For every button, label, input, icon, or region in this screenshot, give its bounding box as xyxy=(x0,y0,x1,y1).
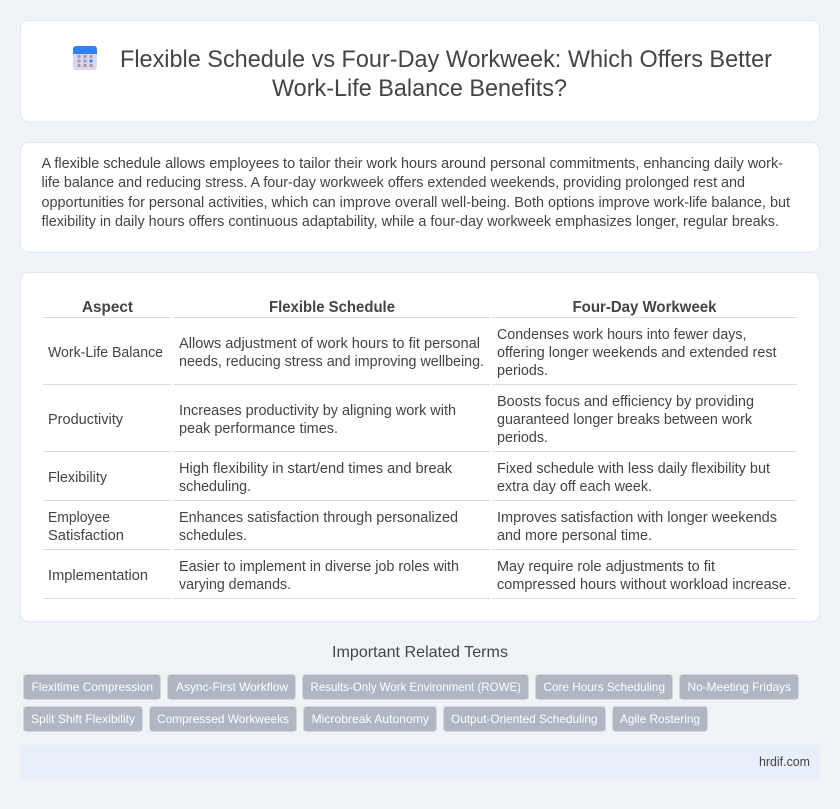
table row: flexibility xyxy=(43,461,797,501)
table row: flexibility: scheduling. xyxy=(179,479,251,495)
table row: employee satisfaction: schedules. xyxy=(179,528,247,544)
tag: Output-Oriented Scheduling: Output-Oriented Scheduling xyxy=(451,712,598,726)
table row: work-life balance: periods. xyxy=(497,363,548,379)
intro paragraph: A flexible schedule allows employees to tailor their work hours around personal commitments, enhancing daily work- xyxy=(42,156,783,172)
table header row xyxy=(43,299,797,318)
tag list xyxy=(24,674,798,732)
table row: work-life balance xyxy=(43,327,797,385)
table row: implementation: varying demands. xyxy=(179,577,291,593)
table row: productivity: peak performance times. xyxy=(179,421,338,437)
table row: implementation: compressed hours without workload increase. xyxy=(497,577,791,593)
tag: Microbreak Autonomy: Microbreak Autonomy xyxy=(312,712,429,726)
table row: productivity: Increases productivity by aligning work with xyxy=(179,403,456,419)
title: Flexible Schedule vs Four-Day Workweek: Which Offers Better xyxy=(120,46,772,73)
table row: work-life balance: needs, reducing stress and improving wellbeing. xyxy=(179,354,484,370)
table header row: Aspect xyxy=(82,299,134,316)
table row: employee satisfaction: and more personal time. xyxy=(497,528,652,544)
tag: No-Meeting Fridays: No-Meeting Fridays xyxy=(688,680,791,694)
tag: Split Shift Flexibility: Split Shift Flexibility xyxy=(31,712,135,726)
intro paragraph: opportunities for personal activities, which can improve overall well-being. Both options improve work-life balance, but xyxy=(42,195,790,211)
heading: important related terms: Important Related Terms xyxy=(332,644,508,661)
panel: title card xyxy=(20,20,820,122)
title xyxy=(120,46,772,102)
tag: Async-First Workflow: Async-First Workflow xyxy=(176,680,288,694)
tag: No-Meeting Fridays xyxy=(680,674,798,700)
table row: flexibility: extra day off each week. xyxy=(497,479,652,495)
table row: implementation: May require role adjustments to fit xyxy=(497,559,715,575)
table row: employee satisfaction: Satisfaction xyxy=(48,528,124,544)
panel: intro text card xyxy=(20,142,820,252)
table row: productivity: guaranteed longer breaks between work xyxy=(497,412,753,428)
tag: Agile Rostering xyxy=(612,706,708,732)
footer bar: hrdif.com xyxy=(759,754,810,769)
table row: productivity: periods. xyxy=(497,430,548,446)
footer bar xyxy=(20,745,820,779)
table row: productivity: Boosts focus and efficiency by providing xyxy=(497,394,754,410)
table header row: Flexible Schedule xyxy=(269,299,395,316)
tag: Core Hours Scheduling xyxy=(536,674,672,700)
table header row: Four-Day Workweek xyxy=(572,299,717,316)
table row: work-life balance: Allows adjustment of work hours to fit personal xyxy=(179,336,480,352)
table row: implementation: Implementation xyxy=(48,568,148,584)
tag: Agile Rostering: Agile Rostering xyxy=(620,712,700,726)
panel: comparison table card xyxy=(20,272,820,622)
icon: calendar xyxy=(73,46,97,70)
table row: flexibility: Flexibility xyxy=(48,470,108,486)
tag: Flexitime Compression: Flexitime Compression xyxy=(32,680,153,694)
tag: Flexitime Compression xyxy=(24,674,160,700)
table row: work-life balance: Work-Life Balance xyxy=(48,345,163,361)
table row: employee satisfaction: Employee xyxy=(48,510,110,526)
table row: productivity: Productivity xyxy=(48,412,124,428)
table row: employee satisfaction: Enhances satisfaction through personalized xyxy=(179,510,458,526)
tag: Compressed Workweeks: Compressed Workweeks xyxy=(157,712,289,726)
table row: work-life balance: offering longer weekends and extended rest xyxy=(497,345,776,361)
tag: Async-First Workflow xyxy=(168,674,296,700)
table row: employee satisfaction xyxy=(43,510,797,550)
tag: Split Shift Flexibility xyxy=(24,706,142,732)
intro paragraph: life balance and reducing stress. A four-day workweek offers extended weekends, providing prolonged rest and xyxy=(42,175,745,191)
tag: Core Hours Scheduling: Core Hours Scheduling xyxy=(544,680,665,694)
table row: employee satisfaction: Improves satisfaction with longer weekends xyxy=(497,510,777,526)
table row: implementation xyxy=(43,559,797,599)
table row: flexibility: Fixed schedule with less daily flexibility but xyxy=(497,461,770,477)
table row: work-life balance: Condenses work hours into fewer days, xyxy=(497,327,746,343)
tag: Microbreak Autonomy xyxy=(304,706,436,732)
table row: productivity xyxy=(43,394,797,452)
table row: flexibility: High flexibility in start/end times and break xyxy=(179,461,453,477)
tag: ROWE xyxy=(302,674,528,700)
table row: implementation: Easier to implement in diverse job roles with xyxy=(179,559,459,575)
tag: ROWE: Results-Only Work Environment (ROWE) xyxy=(310,680,521,694)
intro paragraph: flexibility in daily hours offers continuous adaptability, while a four-day workweek emphasizes longer, regular breaks. xyxy=(42,214,779,230)
tag: Compressed Workweeks xyxy=(150,706,296,732)
tag: Output-Oriented Scheduling xyxy=(444,706,606,732)
title: Work-Life Balance Benefits? xyxy=(272,75,567,102)
intro paragraph xyxy=(42,156,790,230)
